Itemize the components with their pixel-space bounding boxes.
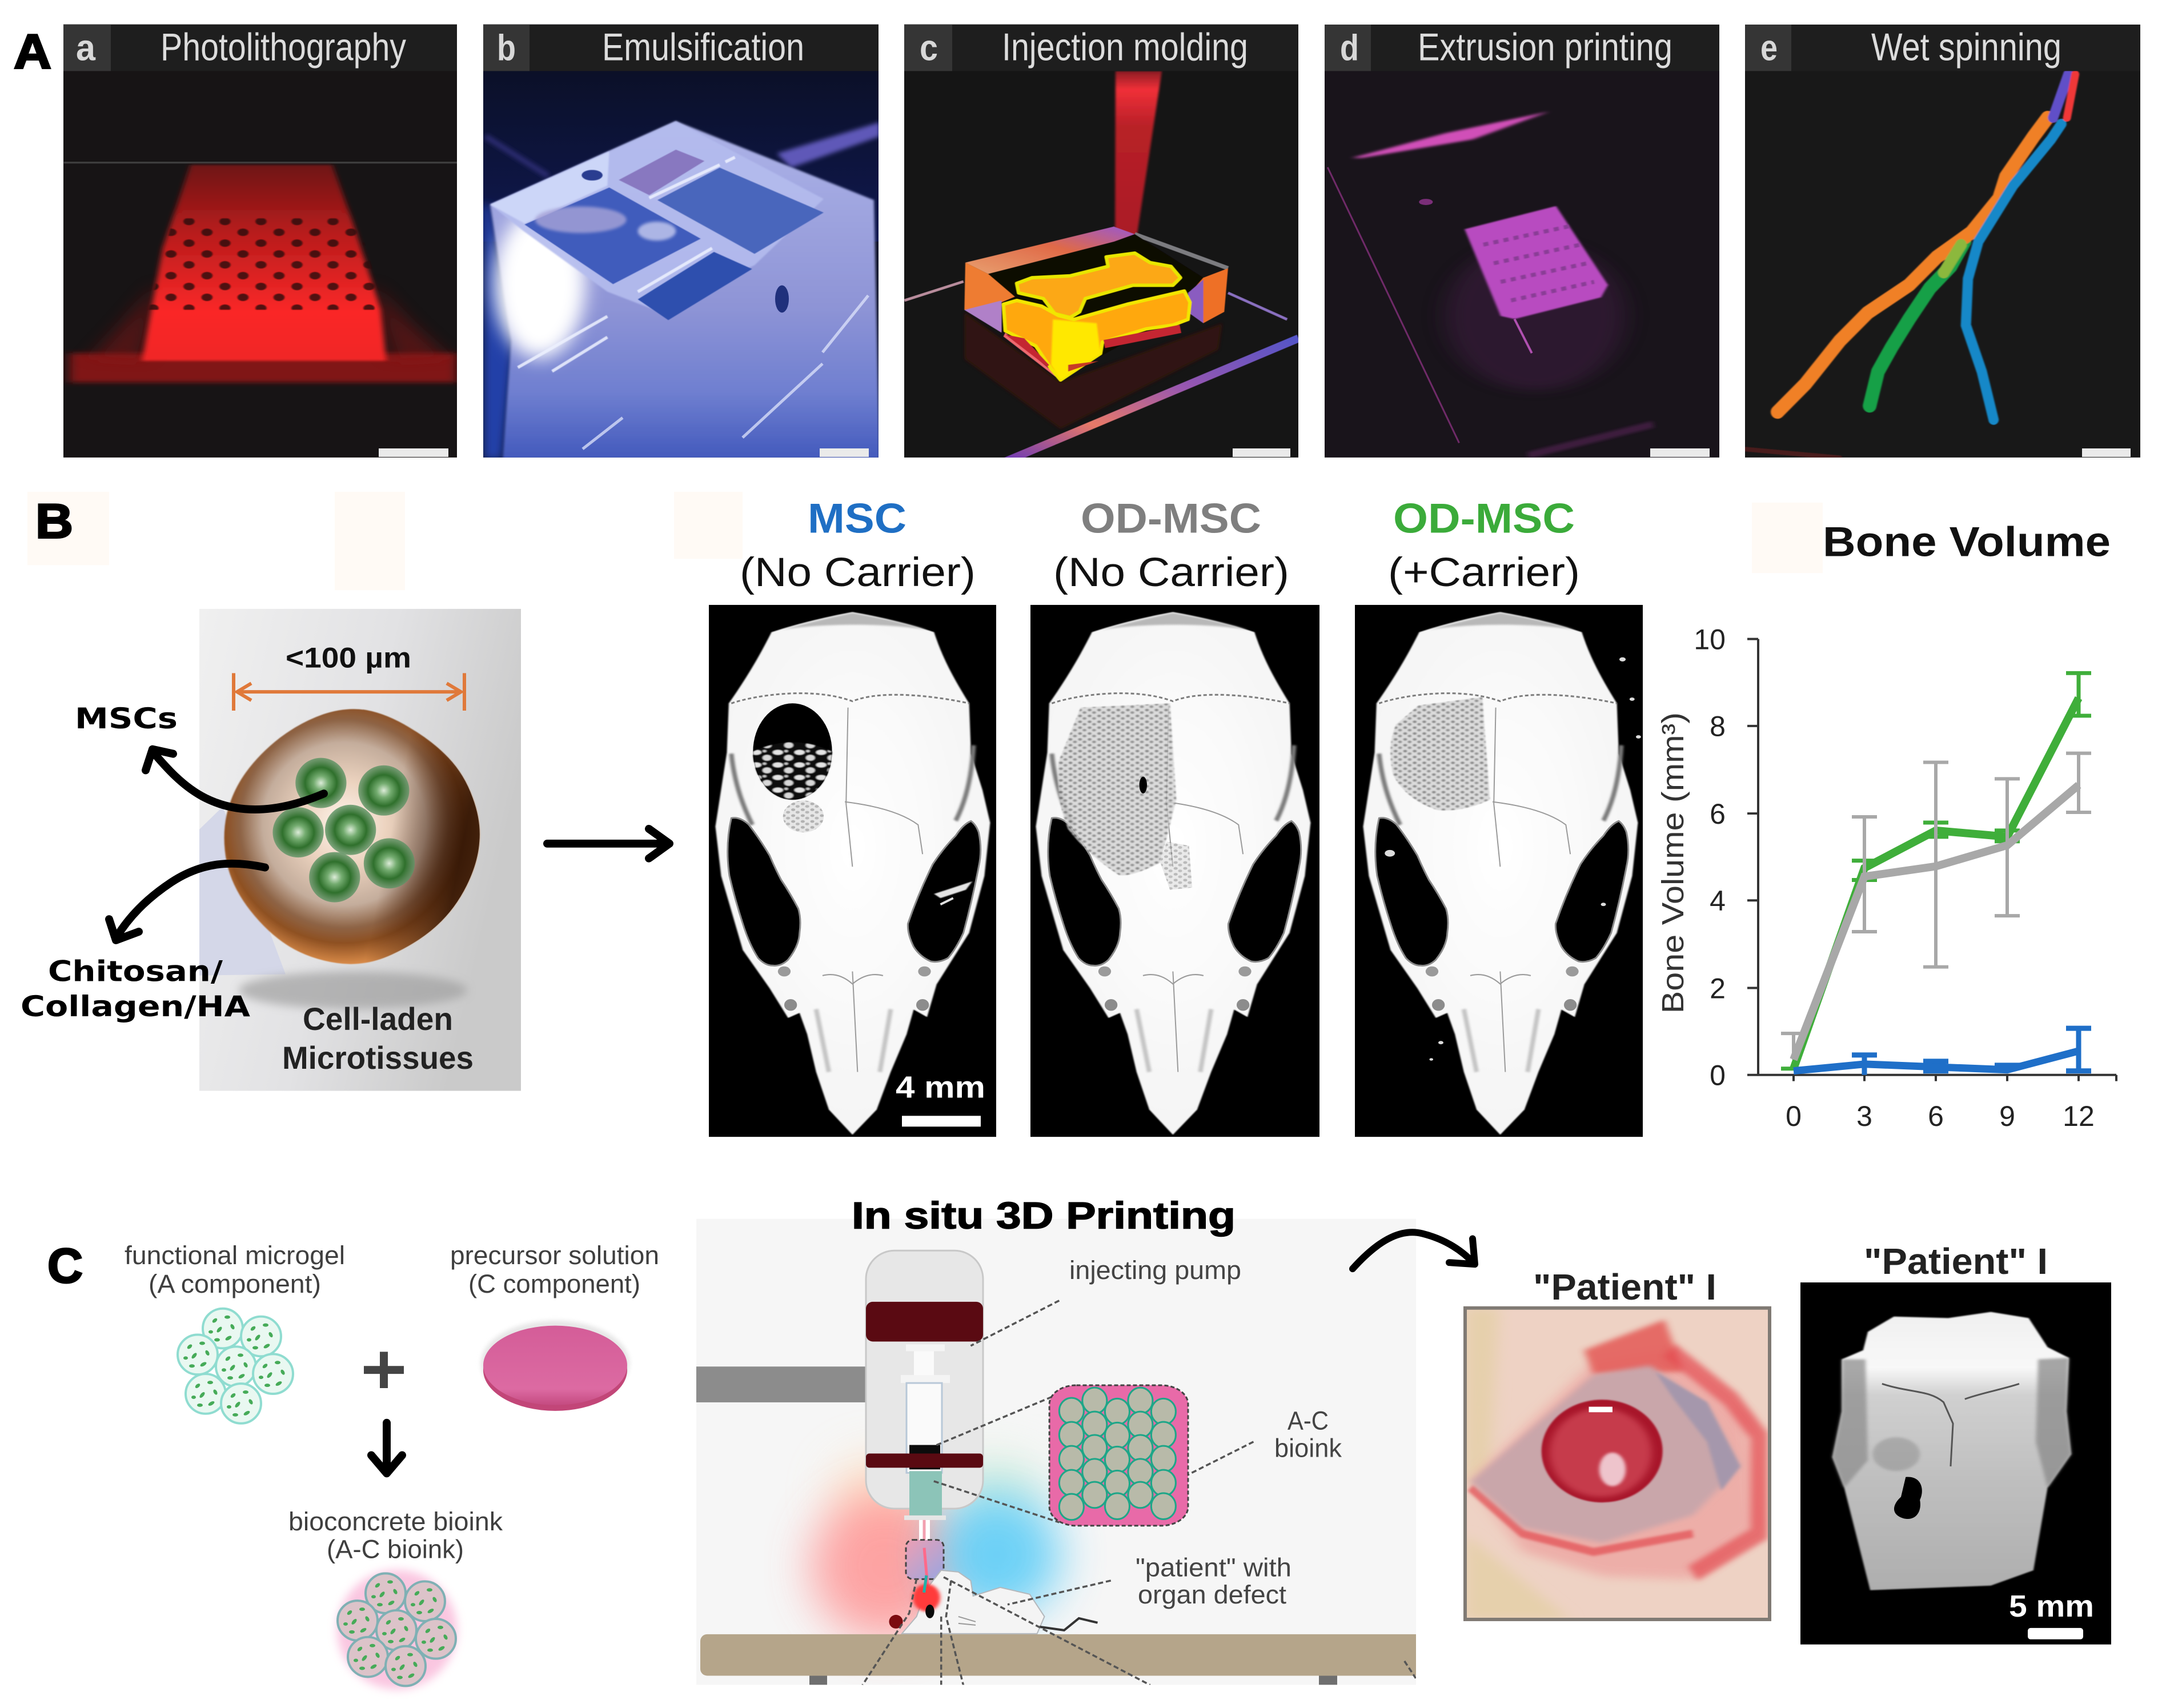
photo: patient wound: "Patient" I [1533, 1266, 1716, 1308]
series: OD-MSC + carrier [1781, 673, 2091, 1069]
x-axis tick labels: 3 [1856, 1100, 1872, 1132]
injecting pump [866, 1250, 983, 1548]
skull column: OD-MSC no carrier: (No Carrier) [1053, 550, 1289, 595]
scale bar: 5 mm: 5 mm [2009, 1589, 2094, 1623]
text: precursor solution: (C component) [468, 1269, 640, 1298]
x-axis tick labels [1786, 1100, 2095, 1132]
icon: microgel cluster [178, 1309, 293, 1424]
arrow: curved to results [1353, 1232, 1475, 1269]
y-axis tick labels: 10 [1694, 624, 1726, 656]
diagram labels: bioink [1274, 1433, 1342, 1462]
x-axis tick labels: 9 [1999, 1100, 2015, 1132]
text: bioconcrete bioink [288, 1506, 503, 1564]
series: MSC no carrier [1794, 1028, 2091, 1075]
arm [696, 1366, 866, 1402]
text: precursor solution: precursor solution [450, 1240, 659, 1270]
text: bioconcrete bioink: (A-C bioink) [327, 1534, 464, 1564]
mouse patient [889, 1570, 1098, 1634]
light glows [811, 1455, 1060, 1640]
panel e: wet spinning: Wet spinning [1871, 26, 2061, 69]
skull column: OD-MSC with carrier: OD-MSC [1393, 495, 1575, 542]
panel C: bioconcrete bioink and in situ printing [47, 1194, 2111, 1689]
text: bioconcrete bioink: bioconcrete bioink [288, 1506, 503, 1536]
y-axis tick labels [1694, 624, 1726, 1092]
heading: in situ 3D printing: In situ 3D Printing [852, 1194, 1236, 1236]
text: precursor solution [450, 1240, 659, 1298]
skull column: MSC no carrier: MSC [808, 495, 906, 542]
skull column: OD-MSC no carrier [1030, 495, 1319, 1137]
label: cell-laden microtissues [282, 1001, 474, 1076]
micro-CT: patient skull: "Patient" I [1864, 1241, 2048, 1282]
label: MSCs with arrow: MSCs [75, 702, 178, 735]
label: Chitosan/Collagen/HA with arrow [21, 864, 265, 1023]
arrow: to skull results [547, 829, 669, 859]
section label B: B [35, 494, 73, 548]
y-axis tick labels: 2 [1710, 973, 1726, 1004]
panel A: fabrication methods [14, 25, 2140, 462]
panel B: microtissues and bone regeneration [21, 492, 2116, 1137]
diagram labels: organ defect [1138, 1579, 1286, 1609]
green cells [272, 758, 415, 903]
panel c: injection molding: c [920, 27, 938, 68]
chart: bone volume [1656, 518, 2116, 1132]
x-axis tick labels: 0 [1786, 1100, 1802, 1132]
panel b: emulsification: Emulsification [602, 26, 804, 69]
panel b: emulsification [483, 25, 880, 460]
leader lines [863, 1301, 1416, 1685]
text: functional microgel [125, 1240, 345, 1298]
x-axis tick labels: 6 [1928, 1100, 1944, 1132]
print head zone [906, 1540, 944, 1586]
panel a: photolithography: a [76, 27, 95, 68]
arrow: down to bioink [371, 1423, 402, 1473]
panel e: wet spinning: e [1760, 27, 1778, 68]
photo: patient wound [1465, 1266, 1770, 1619]
skull column: OD-MSC no carrier: OD-MSC [1081, 495, 1261, 542]
text: functional microgel: functional microgel [125, 1240, 345, 1270]
skull column: OD-MSC with carrier [1355, 495, 1643, 1137]
printing stage [700, 1634, 1426, 1686]
panel d: extrusion printing [1325, 25, 1719, 458]
label: Chitosan/Collagen/HA with arrow: Chitosan/ [48, 955, 223, 988]
scale bar: 5 mm [2009, 1589, 2094, 1639]
panel d: extrusion printing: Extrusion printing [1418, 26, 1672, 69]
panel a: photolithography [63, 25, 457, 458]
panel c: injection molding [904, 25, 1298, 462]
inset: A-C bioink close-up [1049, 1385, 1188, 1526]
y-axis tick labels: 4 [1710, 885, 1726, 917]
section label A: A [14, 25, 51, 79]
size marker: <100 µm [286, 641, 411, 673]
diagram labels: A-C [1287, 1406, 1329, 1436]
diagram: in situ 3D printing [696, 1219, 1426, 1686]
skull column: MSC no carrier [709, 495, 996, 1137]
skull column: OD-MSC with carrier: (+Carrier) [1388, 550, 1580, 595]
icon: bioink cluster [337, 1570, 457, 1689]
scale bar: 4 mm [896, 1070, 985, 1126]
x-axis tick labels: 12 [2063, 1100, 2095, 1132]
label: MSCs with arrow [75, 702, 324, 809]
label: cell-laden microtissues: Cell-laden [303, 1001, 453, 1037]
y-axis tick labels: 6 [1710, 798, 1726, 830]
panel e: wet spinning [1745, 25, 2140, 458]
diagram labels: "patient" with [1136, 1552, 1291, 1582]
skull column: MSC no carrier: (No Carrier) [740, 550, 976, 595]
label: Chitosan/Collagen/HA with arrow: Collagen/HA [21, 990, 250, 1023]
diagram labels: injecting pump [1069, 1255, 1241, 1285]
icon: plus [364, 1352, 404, 1388]
label: cell-laden microtissues: Microtissues [282, 1040, 474, 1076]
y-axis tick labels: 8 [1710, 711, 1726, 743]
panel c: injection molding: Injection molding [1002, 26, 1248, 69]
y-axis tick labels: 0 [1710, 1060, 1726, 1092]
icon: precursor disc [481, 1321, 629, 1411]
axes [1747, 639, 2116, 1081]
faint image artefacts [27, 492, 1823, 590]
series: OD-MSC no carrier [1781, 753, 2091, 1060]
y-axis title: Bone Volume (mm³) [1656, 712, 1690, 1013]
chart title: Bone Volume [1823, 518, 2111, 565]
text: functional microgel: (A component) [149, 1269, 321, 1298]
section label C: C [47, 1238, 83, 1293]
panel b: emulsification: b [497, 27, 516, 68]
panel d: extrusion printing: d [1340, 27, 1359, 68]
microtissue schematic [199, 609, 521, 1091]
microtissue sphere [224, 709, 480, 964]
size marker [234, 641, 464, 711]
panel a: photolithography: Photolithography [161, 26, 406, 69]
micro-CT: patient skull [1800, 1241, 2111, 1645]
diagram labels [1069, 1255, 1342, 1609]
scale bar: 4 mm: 4 mm [896, 1070, 985, 1104]
